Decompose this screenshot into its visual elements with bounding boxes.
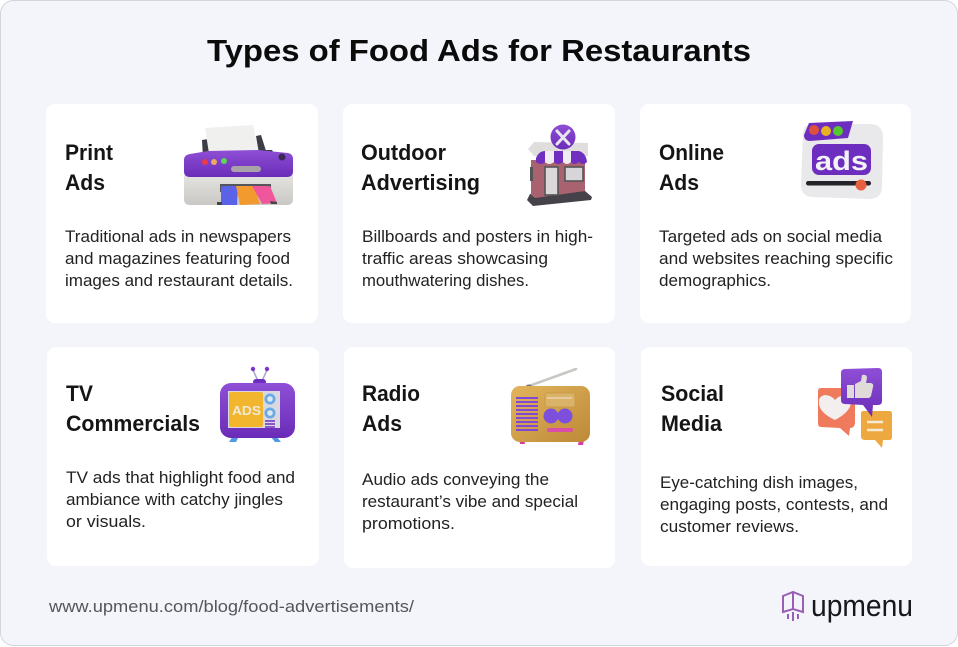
text: outdoor advertising description [362, 228, 593, 290]
text: tv commercials description: ambiance with catchy jingles [66, 491, 283, 509]
panel: online ads [640, 104, 911, 323]
heading: online ads [659, 140, 724, 195]
heading: radio ads [362, 381, 420, 436]
text: online ads description: and websites reaching specific [659, 250, 893, 268]
panel: tv commercials [47, 347, 319, 566]
text: tv commercials description: or visuals. [66, 513, 146, 531]
heading: online ads: Ads [659, 170, 699, 195]
icon: social bubbles [818, 368, 892, 448]
text: social media description: Eye-catching dish images, [660, 474, 858, 492]
text: radio ads description [362, 471, 578, 533]
icon: ads window: ads [815, 146, 868, 176]
upmenu logo: upmenu [811, 588, 913, 623]
text: online ads description [659, 228, 893, 290]
heading: social media: Social [661, 381, 724, 406]
text: print ads description: and magazines featuring food [65, 250, 290, 268]
title: Types of Food Ads for Restaurants [207, 33, 751, 68]
heading: outdoor advertising [361, 140, 480, 195]
source url: www.upmenu.com/blog/food-advertisements/ [48, 597, 414, 616]
heading: tv commercials: TV [66, 381, 93, 406]
text: radio ads description: restaurant’s vibe and special [362, 493, 578, 511]
panel: outdoor advertising [343, 104, 615, 323]
text: tv commercials description [66, 469, 295, 531]
icon: television [220, 367, 295, 442]
text: online ads description: Targeted ads on social media [659, 228, 882, 246]
text: social media description: customer reviews. [660, 518, 799, 536]
icon: upmenu book [783, 592, 803, 621]
icon: ads window [801, 121, 883, 199]
heading: outdoor advertising: Advertising [361, 170, 480, 195]
icon: radio [511, 369, 590, 445]
text: tv commercials description: TV ads that highlight food and [66, 469, 295, 487]
text: outdoor advertising description: Billboards and posters in high- [362, 228, 593, 246]
panel: print ads [46, 104, 318, 323]
heading: online ads: Online [659, 140, 724, 165]
icon: storefront [527, 124, 592, 206]
text: print ads description [65, 228, 293, 290]
text: print ads description: Traditional ads in newspapers [65, 228, 291, 246]
text: print ads description: images and restaurant details. [65, 272, 293, 290]
icon: television: ADS [232, 403, 261, 418]
heading: social media: Media [661, 411, 723, 436]
text: outdoor advertising description: traffic areas showcasing [362, 250, 548, 268]
heading: outdoor advertising: Outdoor [361, 140, 446, 165]
text: radio ads description: promotions. [362, 515, 455, 533]
text: social media description: engaging posts, contests, and [660, 496, 888, 514]
text: online ads description: demographics. [659, 272, 771, 290]
text: radio ads description: Audio ads conveying the [362, 471, 549, 489]
heading: tv commercials [66, 381, 200, 436]
panel: radio ads [344, 347, 615, 568]
text: outdoor advertising description: mouthwatering dishes. [362, 272, 529, 290]
heading: print ads: Print [65, 140, 114, 165]
heading: print ads [65, 140, 114, 195]
panel: social media [641, 347, 912, 566]
heading: radio ads: Radio [362, 381, 420, 406]
heading: radio ads: Ads [362, 411, 402, 436]
text: social media description [660, 474, 888, 536]
heading: tv commercials: Commercials [66, 411, 200, 436]
icon: printer [184, 125, 293, 205]
heading: social media [661, 381, 724, 436]
heading: print ads: Ads [65, 170, 105, 195]
